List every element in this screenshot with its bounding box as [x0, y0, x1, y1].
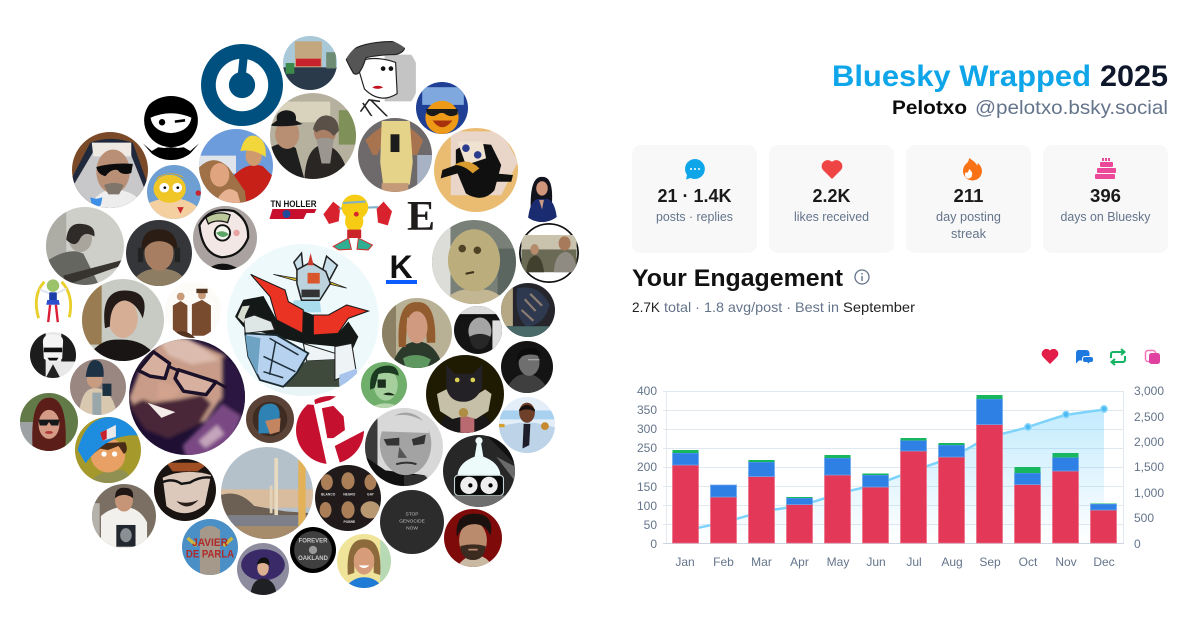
avatar: TN Holler logo	[270, 199, 317, 219]
avatar: grid of skulls: NEGRO	[343, 492, 356, 496]
avatar: protest photo	[283, 36, 337, 90]
chart: monthly engagement	[637, 384, 1164, 569]
stat card: streak: 211	[954, 186, 984, 206]
avatar: green tinted man with mustache	[361, 362, 407, 408]
avatar: giant robot hero	[227, 244, 379, 397]
stat card: posts and replies: posts · replies	[656, 210, 733, 224]
stat card: days on Bluesky: 396	[1090, 186, 1121, 206]
avatar: cartoon woman with dark hair	[346, 41, 416, 116]
avatar: man in nun habit with sunglasses	[72, 132, 148, 208]
left axis labels: 50	[644, 518, 657, 532]
avatar: emoji with sunglasses	[416, 82, 468, 134]
left axis labels: 300	[637, 422, 657, 436]
avatar: Stop Genocide Now: GENOCIDE	[399, 519, 425, 525]
month labels: Mar	[751, 555, 772, 569]
right axis labels: 1,500	[1134, 460, 1164, 474]
icon: cake	[1095, 158, 1116, 179]
avatar: two men on boat	[519, 223, 579, 283]
icon: flame	[963, 158, 982, 180]
title: 2025	[1100, 60, 1168, 93]
avatar: cartoon robot head	[443, 435, 515, 507]
stat card: likes: likes received	[794, 210, 869, 224]
avatar: blue ring logo	[201, 44, 283, 126]
avatar: black and white mustached man	[30, 332, 76, 378]
avatar: grid of skulls: GAY	[367, 492, 375, 496]
cumulative line	[685, 410, 1104, 531]
right axis labels	[1134, 384, 1164, 551]
cumulative points	[1025, 406, 1107, 430]
avatar: Forever Oakland badge: OAKLAND	[298, 556, 329, 562]
avatar: men in brown uniforms	[172, 288, 211, 338]
avatar: woman with guitar in greyscale	[46, 207, 124, 285]
chart legend icons	[1042, 349, 1160, 365]
avatar: man holding book	[92, 484, 156, 548]
avatar: Stop Genocide Now	[380, 490, 444, 554]
green reposts bars	[672, 395, 1116, 504]
avatar: serif letter E: E	[407, 194, 435, 240]
left axis labels: 100	[637, 499, 657, 513]
right axis labels: 0	[1134, 537, 1141, 551]
month labels: Dec	[1093, 555, 1115, 569]
avatar: cartoon mummy with text: DE PARLA	[186, 549, 234, 561]
icon: repost legend	[1111, 349, 1125, 365]
stat card: posts and replies: 21 · 1.4K	[658, 186, 732, 206]
stat card: likes: 2.2K	[812, 186, 850, 206]
avatar: dark abstract portrait	[501, 283, 555, 337]
avatar: Stop Genocide Now: NOW	[406, 526, 418, 532]
avatar: two men selfie with hat	[270, 93, 356, 179]
blue replies bars	[672, 399, 1116, 510]
avatar: wind turbines at sunset	[221, 447, 313, 539]
month labels: Jan	[675, 555, 695, 569]
avatar: bearded man in black and white	[454, 306, 502, 354]
avatar: grid of skulls	[315, 465, 381, 531]
avatar: Forever Oakland badge	[290, 527, 336, 573]
icon: heart	[822, 160, 842, 179]
avatar: woman in blue suit	[528, 176, 557, 222]
avatar: bearded man on dark red	[444, 509, 502, 567]
month labels	[675, 555, 1115, 569]
avatar: man in beanie taking selfie	[70, 359, 126, 415]
user handle: @pelotxo.bsky.social	[975, 97, 1168, 119]
month labels: Nov	[1055, 555, 1077, 569]
avatar: yellow bird lifting weights	[323, 195, 392, 250]
stat card: days on Bluesky	[1043, 145, 1168, 253]
month labels: May	[827, 555, 849, 569]
title: Bluesky Wrapped	[832, 60, 1091, 93]
stat card: streak: streak	[951, 227, 987, 241]
right axis labels: 500	[1134, 511, 1154, 525]
avatar: long-haired man in green shirt	[382, 298, 452, 368]
avatar: magical girl	[36, 279, 71, 322]
stat card: posts and replies	[632, 145, 757, 253]
right axis labels: 2,500	[1134, 410, 1164, 424]
avatar: black cat in ruff collar	[426, 355, 504, 433]
stat card: likes	[769, 145, 894, 253]
engagement summary: September	[843, 299, 915, 315]
avatar: gym selfie	[358, 118, 432, 192]
stat card: streak: day posting	[936, 210, 1001, 224]
red likes bars	[672, 424, 1116, 543]
icon: speech bubble	[685, 159, 705, 180]
avatar: TN Holler logo: TN HOLLER	[270, 199, 317, 209]
left axis labels: 400	[637, 384, 657, 398]
grid lines	[663, 391, 1124, 543]
user handle	[892, 97, 1168, 119]
month labels: Feb	[713, 555, 734, 569]
avatar: cartoon boy with blue cap	[75, 417, 141, 483]
avatar: couple with yellow hat	[199, 129, 273, 203]
avatar: cartoon mummy with text	[182, 519, 238, 575]
avatar: red letter P logo	[296, 396, 364, 464]
right axis labels: 3,000	[1134, 384, 1164, 398]
stat card: days on Bluesky: days on Bluesky	[1060, 210, 1151, 224]
section heading: Your Engagement	[632, 265, 843, 292]
left axis labels: 0	[650, 537, 657, 551]
left axis labels	[637, 384, 657, 551]
avatar: cartoon man in a spaceship	[237, 543, 289, 595]
avatar: drawn woman with glasses	[154, 459, 216, 521]
engagement summary	[632, 299, 915, 315]
avatar: grey portrait of older man	[365, 408, 443, 486]
avatar: cartoon mummy with text: JAVIER	[192, 537, 228, 549]
avatar: cartoon with green eye	[193, 206, 257, 270]
avatar: letter K with blue underline: K	[389, 249, 413, 285]
icon: quote legend	[1146, 350, 1160, 364]
icon: reply legend	[1076, 350, 1094, 364]
avatar: smiling man with glasses and purple tint	[129, 337, 247, 460]
left axis labels: 350	[637, 403, 657, 417]
avatar: Stop Genocide Now: STOP	[406, 512, 418, 518]
icon: info	[855, 270, 869, 284]
avatar: black chick cartoon	[434, 128, 518, 212]
cumulative area	[685, 410, 1104, 543]
month labels: Aug	[941, 555, 963, 569]
avatar: yellow cartoon boy	[147, 165, 201, 219]
avatar: black ninja	[143, 96, 199, 160]
avatar bubble cluster	[20, 36, 579, 595]
right axis labels: 1,000	[1134, 486, 1164, 500]
stat card: streak	[906, 145, 1031, 253]
avatar: uniformed police officer	[499, 397, 555, 453]
avatar: grid of skulls: BLANCO	[321, 492, 336, 496]
avatar: smiling man with mullet	[337, 534, 391, 588]
avatar: grid of skulls: POBRE	[343, 520, 356, 524]
month labels: Jul	[906, 555, 922, 569]
avatar: red-haired woman with sunglasses	[20, 393, 78, 451]
month labels: Sep	[979, 555, 1001, 569]
month labels: Jun	[866, 555, 886, 569]
avatar: black and white man with glasses	[501, 341, 553, 393]
left axis labels: 250	[637, 441, 657, 455]
icon: like legend	[1042, 349, 1058, 364]
month labels: Oct	[1019, 555, 1038, 569]
left axis labels: 200	[637, 460, 657, 474]
user handle: Pelotxo	[892, 98, 967, 119]
engagement summary: 2.7K	[632, 299, 661, 315]
avatar: Forever Oakland badge: FOREVER	[299, 539, 328, 545]
right axis labels: 2,000	[1134, 435, 1164, 449]
left axis labels: 150	[637, 480, 657, 494]
avatar: man with headset	[126, 220, 192, 286]
engagement summary: total · 1.8 avg/post · Best in	[664, 299, 839, 315]
month labels: Apr	[790, 555, 809, 569]
avatar: woman with dark curly hair	[82, 279, 164, 361]
avatar: paper mache egg head	[432, 220, 516, 304]
avatar: masked blue superhero	[246, 395, 294, 443]
